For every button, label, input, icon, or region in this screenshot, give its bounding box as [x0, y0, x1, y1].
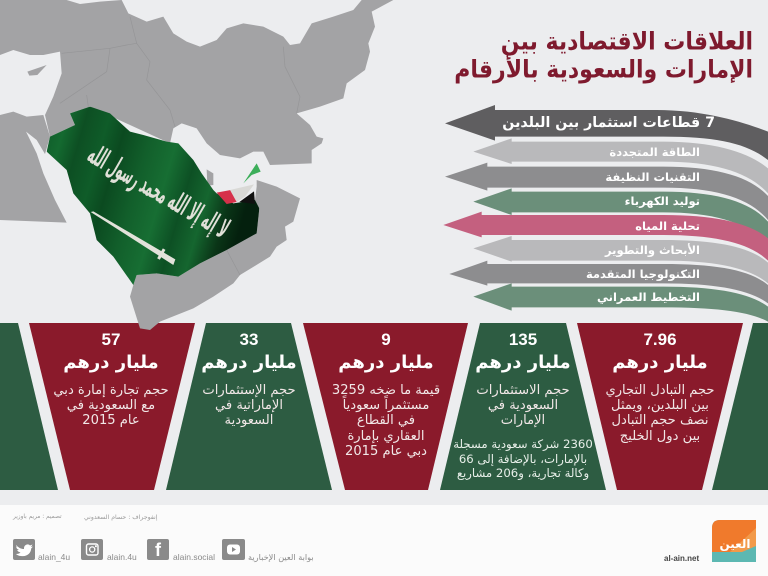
icon: facebook: f	[155, 540, 162, 560]
stat: 7.96: 7.96	[643, 330, 677, 349]
arrow: research	[473, 236, 768, 283]
text: instagram handle: alain.4u	[107, 552, 137, 562]
stat: 135: بالإمارات، بالإضافة إلى 66	[459, 452, 587, 466]
flag: UAE	[217, 163, 261, 204]
stat: 7.96: مليار درهم	[612, 352, 708, 373]
credit: infographic: إنفوجراف : حسام السعدوني	[84, 514, 157, 521]
arrows: investment sectors	[444, 105, 768, 322]
icon: twitter	[13, 539, 35, 560]
stat: 7.96: حجم التبادل التجاري	[605, 383, 715, 398]
stat: 57	[53, 330, 169, 428]
icon: youtube	[222, 539, 245, 560]
stat: 135: الإمارات	[501, 413, 545, 428]
stat: 135: مليار درهم	[475, 352, 571, 373]
stat: 135	[453, 330, 593, 480]
stat: 33: مليار درهم	[201, 352, 297, 373]
stat: 7.96: بين البلدين، ويمثل	[611, 398, 709, 413]
stat: 9: قيمة ما ضخه 3259	[332, 383, 440, 398]
stat: 9: دبي عام 2015	[345, 444, 427, 459]
map: Middle East with flags	[0, 0, 394, 330]
title: الإمارات والسعودية بالأرقام	[454, 56, 753, 84]
sword	[91, 211, 175, 265]
stat: 9	[332, 330, 440, 459]
title: العلاقات الاقتصادية بين	[501, 28, 753, 56]
label: desalination: تحلية المياه	[635, 219, 700, 233]
arrow: clean tech	[445, 163, 768, 220]
logo: Al Ain: العين	[719, 537, 751, 551]
arrow: desalination	[443, 212, 768, 261]
arrow heading: 7 قطاعات استثمار بين البلدين	[502, 115, 715, 131]
arrow: power generation	[473, 188, 768, 247]
land: Qatar	[207, 169, 213, 186]
title	[454, 28, 753, 84]
stat: 7.96: نصف حجم التبادل	[611, 413, 709, 428]
stat: 135: السعودية في	[488, 398, 558, 413]
arrow: header	[445, 105, 768, 160]
stat: 9: العقاري بإمارة	[347, 429, 425, 444]
stat: 9: 9	[381, 330, 391, 349]
stat: 33: 33	[240, 330, 258, 349]
icon: facebook	[147, 539, 169, 560]
stat: 9: مستثمراً سعودياً	[343, 398, 429, 413]
land: Oman and Yemen	[130, 180, 300, 330]
flag: Saudi Arabia	[43, 103, 263, 290]
credit: design: تصميم : مريم باوزير	[13, 514, 62, 520]
land: Egypt and Sudan	[0, 112, 67, 223]
land: Cyprus	[27, 65, 47, 76]
stat: 135: وكالة تجارية، و206 مشاريع	[457, 466, 589, 480]
logo: Al Ain	[712, 520, 756, 562]
stat: 33: السعودية	[225, 413, 273, 428]
label: urban planning: التخطيط العمراني	[597, 290, 700, 304]
stat: 135: 135	[509, 330, 537, 349]
stat: 57: مع السعودية في	[67, 398, 155, 413]
stat: 7.96: بين دول الخليج	[620, 429, 700, 444]
stat: 9: في القطاع	[357, 413, 415, 428]
shahada: لا إله إلا الله محمد رسول الله	[82, 138, 235, 244]
arrow: advanced technology	[449, 261, 768, 303]
stat: 33: الإماراتية في	[215, 398, 283, 413]
stat: 135: 2360 شركة سعودية مسجلة	[453, 437, 593, 451]
stat: 57: عام 2015	[82, 413, 140, 428]
stat: 7.96	[605, 330, 715, 444]
stat: 33	[201, 330, 297, 428]
arrow: urban planning	[473, 283, 768, 322]
stat: 135: حجم الاستثمارات	[476, 383, 570, 398]
icon: instagram	[81, 539, 103, 560]
label: research: الأبحاث والتطوير	[605, 243, 700, 257]
text: website: al-ain.net	[664, 554, 699, 563]
text: facebook handle: alain.social	[173, 552, 215, 562]
stat: 9: مليار درهم	[338, 352, 434, 373]
text: twitter handle: alain_4u	[38, 552, 70, 562]
footer background	[0, 505, 768, 576]
stat: 57: حجم تجارة إمارة دبي	[53, 383, 169, 398]
label: power generation: توليد الكهرباء	[625, 194, 700, 208]
stat: 57: 57	[102, 330, 120, 349]
arrow: renewable energy	[473, 138, 768, 193]
text: youtube channel: بوابة العين الإخبارية	[248, 552, 314, 562]
country borders	[60, 17, 300, 275]
stat: 33: حجم الإستثمارات	[202, 383, 296, 398]
stat: 57: مليار درهم	[63, 352, 159, 373]
label: clean tech: التقنيات النظيفة	[605, 170, 700, 184]
land: Turkey, Levant, Iraq, Iran, Afghanistan, Pakistan	[0, 0, 393, 165]
label: advanced technology: التكنولوجيا المتقدمة	[586, 267, 700, 281]
label: renewable energy: الطاقة المتجددة	[609, 145, 700, 159]
